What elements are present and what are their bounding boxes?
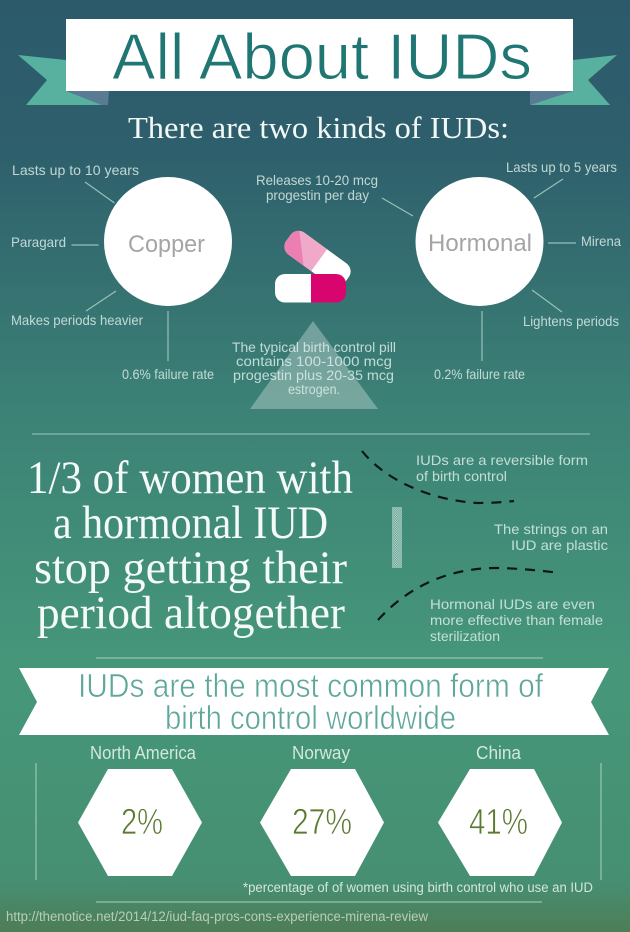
icon: pills — [275, 230, 351, 302]
stat: North America: North America — [90, 743, 197, 763]
label: hormonal: Hormonal — [428, 230, 532, 257]
fact: strings — [494, 521, 608, 553]
fact: periods: Lightens periods — [523, 313, 619, 329]
fact: duration: Lasts up to 5 years — [506, 159, 617, 175]
banner panel — [66, 19, 573, 91]
dotted strip — [392, 507, 402, 568]
circle: hormonal — [416, 177, 544, 306]
fact: effectiveness: Hormonal IUDs are even — [430, 596, 595, 612]
icon: upper pill — [284, 230, 351, 282]
triangle — [250, 321, 378, 409]
fact: failure rate: 0.2% failure rate — [434, 366, 525, 382]
label: copper: Copper — [128, 231, 205, 258]
footnote: *percentage of of women using birth control who use an IUD — [243, 880, 593, 895]
fact: effectiveness: sterilization — [430, 628, 500, 644]
stat: North America: 2% — [121, 801, 163, 842]
banner heading — [78, 667, 544, 736]
stat: Norway: Norway — [292, 743, 350, 763]
fact: progestin release: progestin per day — [266, 187, 369, 203]
headline statistic: a hormonal IUD — [53, 497, 328, 549]
circle: copper — [104, 177, 232, 306]
fact: effectiveness — [430, 596, 603, 644]
headline statistic: period altogether — [37, 587, 345, 639]
banner: worldwide — [19, 667, 609, 736]
panel: copper IUD — [11, 162, 232, 382]
callout text: progestin plus 20-35 mcg — [233, 367, 394, 383]
source url: http://thenotice.net/2014/12/iud-faq-pros-cons-experience-mirena-review — [6, 909, 428, 924]
stat: China — [438, 743, 562, 876]
ribbon: right tail — [530, 55, 617, 105]
panel: hormonal IUD — [256, 159, 621, 382]
heading: two kinds: There are two kinds of IUDs: — [128, 110, 509, 145]
stat: Norway: 27% — [292, 801, 352, 842]
connector lines: copper — [72, 182, 168, 361]
stat: Norway — [260, 743, 384, 876]
fact: reversible — [416, 452, 588, 484]
callout text: contains 100-1000 mcg — [236, 353, 392, 369]
icon: lower pill — [275, 274, 346, 303]
fact: brand: Mirena — [581, 233, 621, 249]
callout text — [232, 339, 396, 397]
panel: regional statistics — [36, 743, 601, 880]
callout text: estrogen. — [288, 381, 340, 397]
stat: North America — [78, 743, 202, 876]
title: All About IUDs — [112, 20, 532, 93]
fact: strings: The strings on an — [494, 521, 608, 537]
stat: China: 41% — [469, 801, 528, 842]
banner heading: IUDs are the most common form of — [78, 667, 544, 704]
callout: birth control pill comparison — [232, 321, 396, 409]
callout text: The typical birth control pill — [232, 339, 396, 355]
fact: periods: Makes periods heavier — [11, 312, 143, 328]
side rule right — [600, 763, 602, 880]
side rule left — [35, 763, 37, 880]
banner heading: birth control worldwide — [165, 699, 456, 736]
dashed curve: upper string — [362, 451, 514, 503]
fact: strings: IUD are plastic — [511, 537, 608, 553]
dashed curve: lower string — [378, 568, 559, 620]
headline statistic — [27, 452, 353, 639]
ribbon shape — [19, 668, 609, 735]
fact: failure rate: 0.6% failure rate — [122, 366, 214, 382]
fact: brand: Paragard — [11, 234, 66, 250]
headline statistic: stop getting their — [34, 542, 347, 594]
fact: progestin release — [256, 172, 378, 203]
title banner — [18, 19, 617, 105]
ribbon: left tail — [18, 55, 109, 105]
headline statistic: 1/3 of women with — [27, 452, 353, 504]
fact: reversible: IUDs are a reversible form — [416, 452, 588, 468]
connector lines: hormonal — [382, 179, 576, 361]
fact: progestin release: Releases 10-20 mcg — [256, 172, 378, 188]
fact: effectiveness: more effective than female — [430, 612, 603, 628]
stat: China: China — [476, 743, 522, 763]
fact: duration: Lasts up to 10 years — [12, 162, 139, 178]
fact: reversible: of birth control — [416, 468, 507, 484]
